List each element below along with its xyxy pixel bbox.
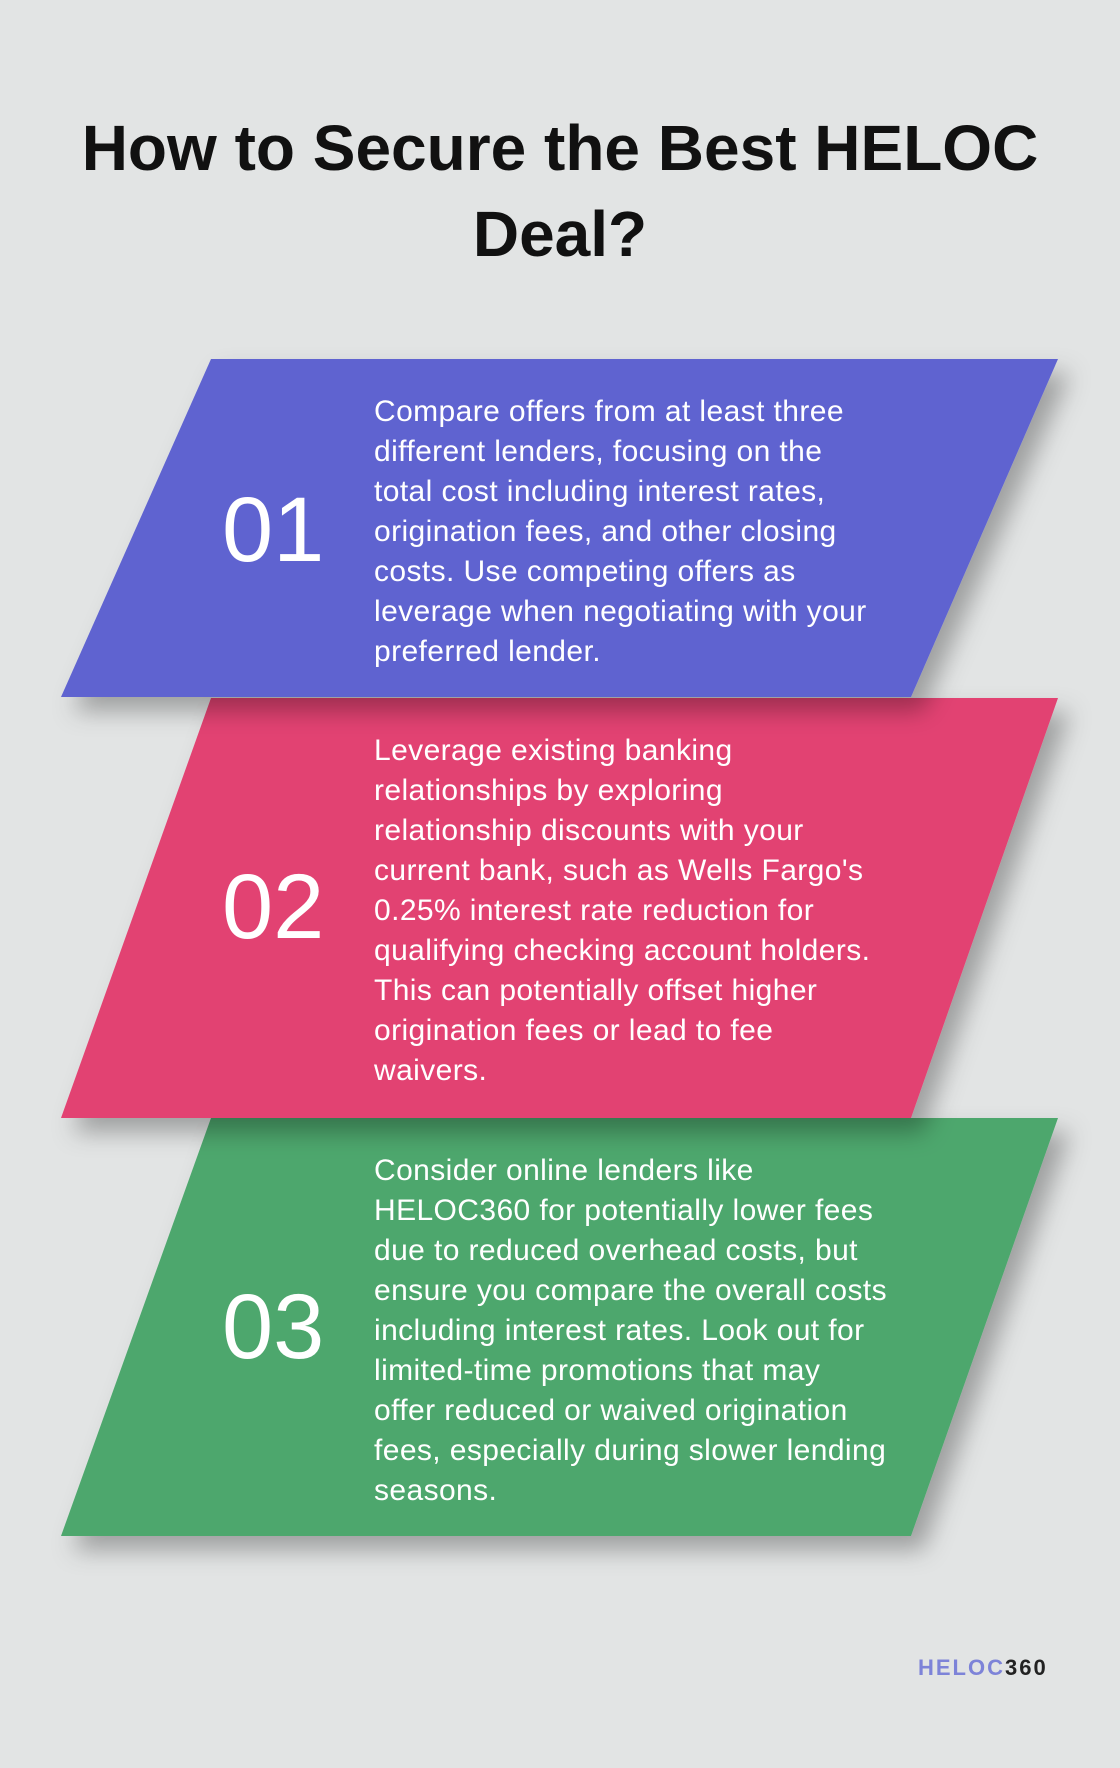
panel 2 shape <box>61 698 1058 1118</box>
text 03: fees, especially during slower lending <box>374 1434 886 1467</box>
text 02: origination fees or lead to fee <box>374 1014 773 1047</box>
text 01: Compare offers from at least three <box>374 395 844 428</box>
text 01: leverage when negotiating with your <box>374 595 867 628</box>
text 02: current bank, such as Wells Fargo's <box>374 854 863 887</box>
text 02: relationship discounts with your <box>374 814 804 847</box>
text 02: Leverage existing banking <box>374 734 733 767</box>
text 03: Consider online lenders like <box>374 1154 754 1187</box>
number 01: 01 <box>222 478 324 580</box>
number 02: 02 <box>222 856 324 958</box>
panel 1 shape <box>61 359 1058 697</box>
number 03: 03 <box>222 1276 324 1378</box>
text 01: total cost including interest rates, <box>374 475 825 508</box>
title: How to Secure the Best HELOC <box>82 112 1038 184</box>
text 01: different lenders, focusing on the <box>374 435 822 468</box>
text 03: HELOC360 for potentially lower fees <box>374 1194 873 1227</box>
text 03: ensure you compare the overall costs <box>374 1274 887 1307</box>
text 02: qualifying checking account holders. <box>374 934 870 967</box>
text 02 <box>374 734 870 1087</box>
text 03: due to reduced overhead costs, but <box>374 1234 858 1267</box>
text 01: preferred lender. <box>374 635 601 668</box>
text 01: origination fees, and other closing <box>374 515 837 548</box>
text 03: seasons. <box>374 1474 497 1507</box>
text 03: including interest rates. Look out for <box>374 1314 864 1347</box>
title: Deal? <box>473 198 647 270</box>
text 02: waivers. <box>374 1054 487 1087</box>
logo: HELOC360 <box>918 1655 1048 1680</box>
text 01: costs. Use competing offers as <box>374 555 796 588</box>
panel 3 shape <box>61 1118 1058 1536</box>
text 03: limited-time promotions that may <box>374 1354 820 1387</box>
text 02: This can potentially offset higher <box>374 974 817 1007</box>
text 02: 0.25% interest rate reduction for <box>374 894 814 927</box>
title <box>82 112 1038 270</box>
text 01 <box>374 395 867 668</box>
text 02: relationships by exploring <box>374 774 723 807</box>
text 03: offer reduced or waived origination <box>374 1394 848 1427</box>
text 03 <box>374 1154 887 1507</box>
